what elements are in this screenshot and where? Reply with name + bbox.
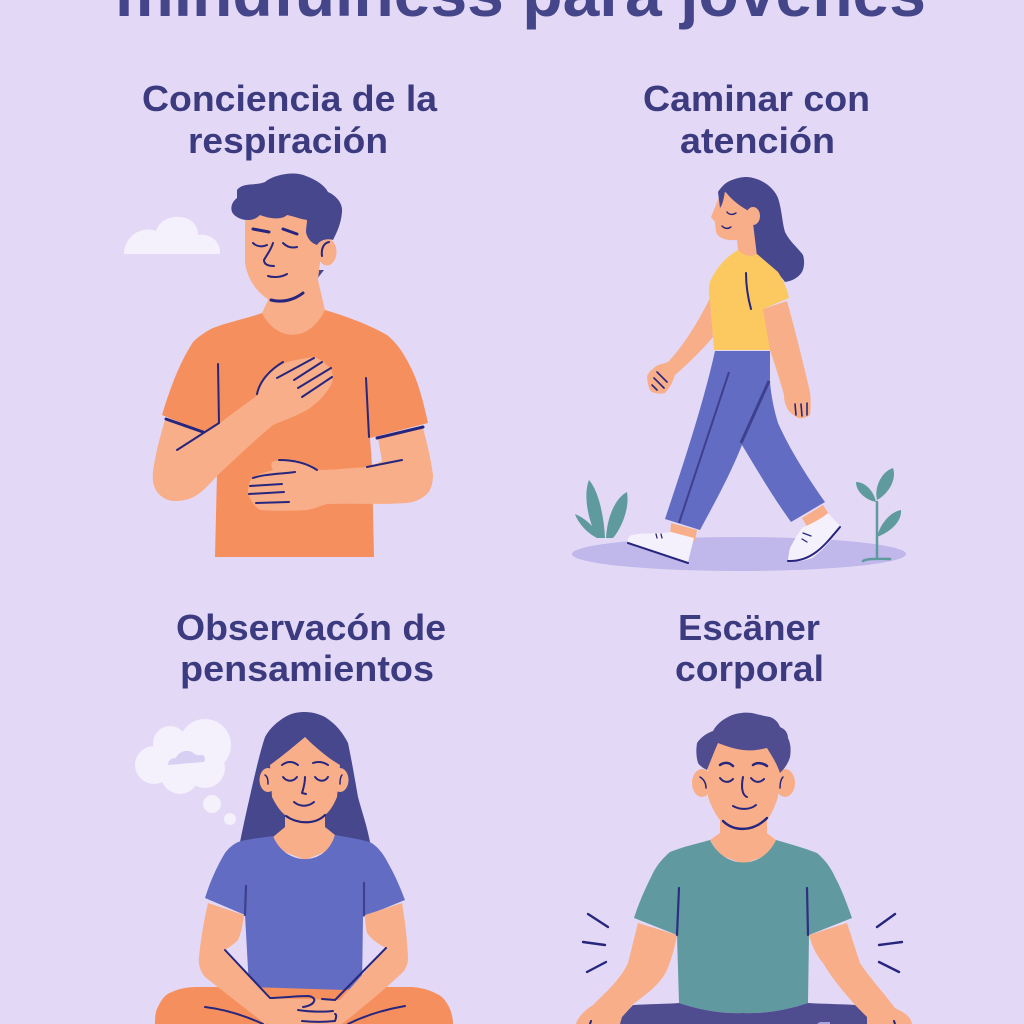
- heading: body scan: Escäner: [678, 607, 820, 648]
- icon: thought bubble: [135, 719, 236, 825]
- illustration: woman meditating: [155, 712, 453, 1024]
- ears: [692, 769, 712, 797]
- legs: [620, 1003, 867, 1024]
- icon: cloud: [124, 217, 220, 254]
- blue shirt: [205, 835, 405, 990]
- chest arm: [153, 357, 333, 501]
- heading: mindful walking: atención: [680, 120, 835, 161]
- heading: body scan: corporal: [675, 648, 824, 689]
- ankles: [670, 505, 829, 541]
- trousers: [665, 351, 825, 530]
- arms: [199, 903, 408, 1024]
- hair: [231, 174, 342, 245]
- features: [590, 763, 895, 1024]
- front arm: [763, 301, 811, 418]
- left plant: [575, 480, 628, 538]
- shoe details: [628, 527, 840, 563]
- ear: [318, 238, 336, 266]
- face: [708, 740, 780, 830]
- neck: [273, 810, 335, 860]
- right plant: [856, 468, 901, 561]
- heading: observing thoughts: [176, 607, 446, 689]
- illustration: woman walking: [572, 177, 906, 571]
- line details: [205, 762, 405, 1024]
- yellow top: [709, 250, 789, 350]
- illustration: man body scan meditation: [576, 713, 912, 1024]
- hair front: [718, 180, 760, 215]
- heading: breathing awareness: Conciencia de la: [142, 78, 438, 119]
- heading: observing thoughts: pensamientos: [180, 648, 434, 689]
- heading: observing thoughts: Observacón de: [176, 607, 446, 648]
- long hair: [240, 712, 370, 842]
- facial features and shirt lines: [166, 229, 423, 503]
- trousers creases: [679, 372, 729, 523]
- hand detail: [817, 1022, 830, 1024]
- crossed legs: [155, 987, 453, 1024]
- face: [245, 210, 322, 302]
- scan marks: [583, 914, 902, 972]
- heading: mindful walking: Caminar con: [643, 78, 870, 119]
- heading: breathing awareness: respiración: [188, 120, 388, 161]
- ears: [260, 768, 276, 792]
- face: [270, 737, 340, 822]
- belly arm: [248, 428, 433, 511]
- neck: [710, 815, 776, 864]
- dark hair nape: [316, 270, 324, 279]
- hair back: [718, 177, 804, 282]
- details: [722, 212, 807, 416]
- ear: [746, 207, 760, 225]
- green shirt: [634, 840, 852, 1013]
- hand lines: [652, 372, 667, 390]
- heading: mindful walking: [643, 78, 870, 161]
- heading: body scan: [675, 607, 824, 689]
- right shoe: [788, 513, 841, 562]
- orange lap between arms: [269, 992, 340, 998]
- back arm: [647, 298, 713, 394]
- left shoe: [628, 532, 694, 562]
- neck: [262, 276, 326, 336]
- illustration: man with hand on chest: [153, 174, 433, 557]
- heading: breathing awareness: [142, 78, 438, 161]
- hair: [696, 713, 791, 773]
- arms: [576, 923, 677, 1024]
- orange shirt: [162, 310, 428, 557]
- ground ellipse: [572, 537, 906, 571]
- neck and face: [711, 190, 757, 257]
